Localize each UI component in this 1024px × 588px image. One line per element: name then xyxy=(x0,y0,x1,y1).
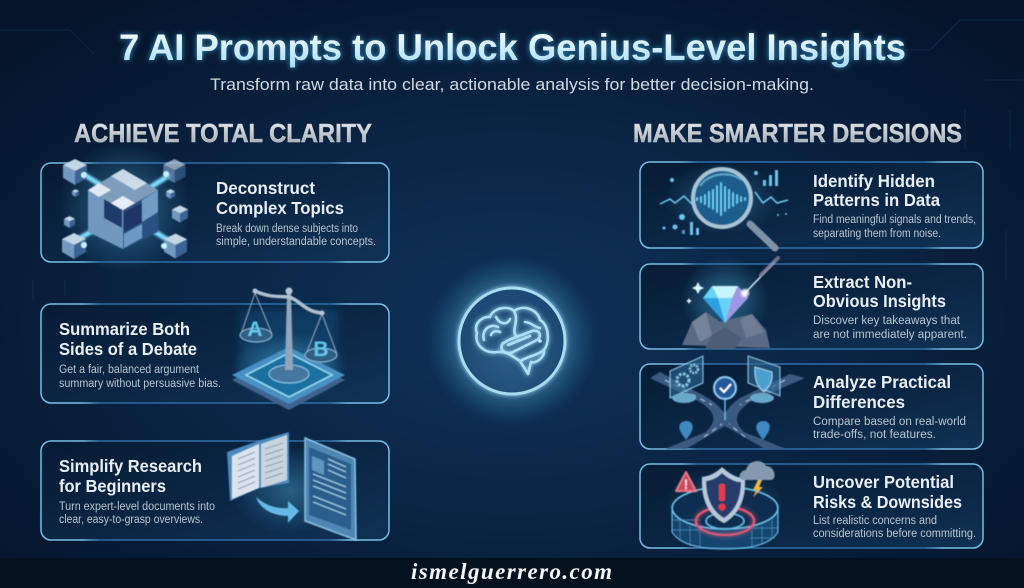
panel: analyze differences xyxy=(640,356,983,449)
text: summarize: summary without persuasive bias. xyxy=(59,378,221,390)
title: 7 AI Prompts to Unlock Genius-Level Insights xyxy=(119,27,906,68)
text: deconstruct: Deconstruct xyxy=(216,178,315,198)
text: uncover: Uncover Potential xyxy=(813,472,954,492)
text: summarize xyxy=(59,319,221,390)
text: deconstruct: Break down dense subjects into xyxy=(216,223,358,235)
panel: summarize both sides xyxy=(41,288,389,410)
text: summarize: Summarize Both xyxy=(59,319,190,339)
text: uncover xyxy=(813,472,976,540)
subtitle: Transform raw data into clear, actionable analysis for better decision-making. xyxy=(210,75,814,94)
text: summarize: Get a fair, balanced argument xyxy=(59,364,200,376)
text: simplify: Turn expert-level documents into xyxy=(59,501,215,513)
text: analyze: Analyze Practical xyxy=(813,372,951,392)
panel: simplify research xyxy=(41,432,389,540)
icon: balance scale xyxy=(231,288,347,410)
text: simplify: clear, easy-to-grasp overviews. xyxy=(59,514,203,526)
panel: uncover risks xyxy=(640,461,983,549)
icon: book to tablet xyxy=(227,432,356,540)
text: identify: Identify Hidden xyxy=(813,171,935,191)
text: uncover: List realistic concerns and xyxy=(813,515,937,527)
text: uncover: Risks & Downsides xyxy=(813,492,962,512)
icon: warning shield: ! xyxy=(684,476,688,492)
heading: achieve total clarity: ACHIEVE TOTAL CLARITY xyxy=(74,118,372,148)
icon: crossroads xyxy=(650,356,805,449)
text: identify: separating them from noise. xyxy=(813,228,941,240)
text: analyze: Differences xyxy=(813,392,905,412)
text: simplify xyxy=(59,456,215,526)
text: extract: are not immediately apparent. xyxy=(813,329,967,341)
text: identify: Patterns in Data xyxy=(813,190,940,210)
center brain icon xyxy=(426,255,598,427)
text: extract xyxy=(813,272,967,341)
text: deconstruct: Complex Topics xyxy=(216,198,344,218)
footer band xyxy=(0,558,1024,588)
text: simplify: Simplify Research xyxy=(59,456,202,476)
icon: balance scale: B xyxy=(313,338,329,361)
icon: puzzle cube xyxy=(58,141,190,273)
panel: extract insights xyxy=(640,256,983,349)
icon: diamond in rock xyxy=(681,256,778,349)
text: deconstruct xyxy=(216,178,376,248)
icon: balance scale: A xyxy=(247,318,263,341)
panel: identify hidden patterns xyxy=(640,162,983,248)
text: extract: Extract Non- xyxy=(813,272,912,292)
text: identify: Find meaningful signals and trends, xyxy=(813,214,976,226)
text: analyze: trade-offs, not features. xyxy=(813,429,936,441)
text: analyze: Compare based on real-world xyxy=(813,416,966,428)
text: extract: Obvious Insights xyxy=(813,291,946,311)
text: deconstruct: simple, understandable concepts. xyxy=(216,236,376,248)
text: analyze xyxy=(813,372,966,441)
text: extract: Discover key takeaways that xyxy=(813,315,961,327)
heading: make smarter decisions: MAKE SMARTER DECISIONS xyxy=(633,118,962,148)
panel: deconstruct complex topics xyxy=(41,141,389,273)
footer website: ismelguerrero.com xyxy=(411,559,612,584)
text: summarize: Sides of a Debate xyxy=(59,339,197,359)
icon: warning shield xyxy=(665,461,785,549)
text: identify xyxy=(813,171,976,240)
icon: magnifying glass xyxy=(660,162,788,248)
text: simplify: for Beginners xyxy=(59,476,166,496)
text: uncover: considerations before committing. xyxy=(813,528,976,540)
